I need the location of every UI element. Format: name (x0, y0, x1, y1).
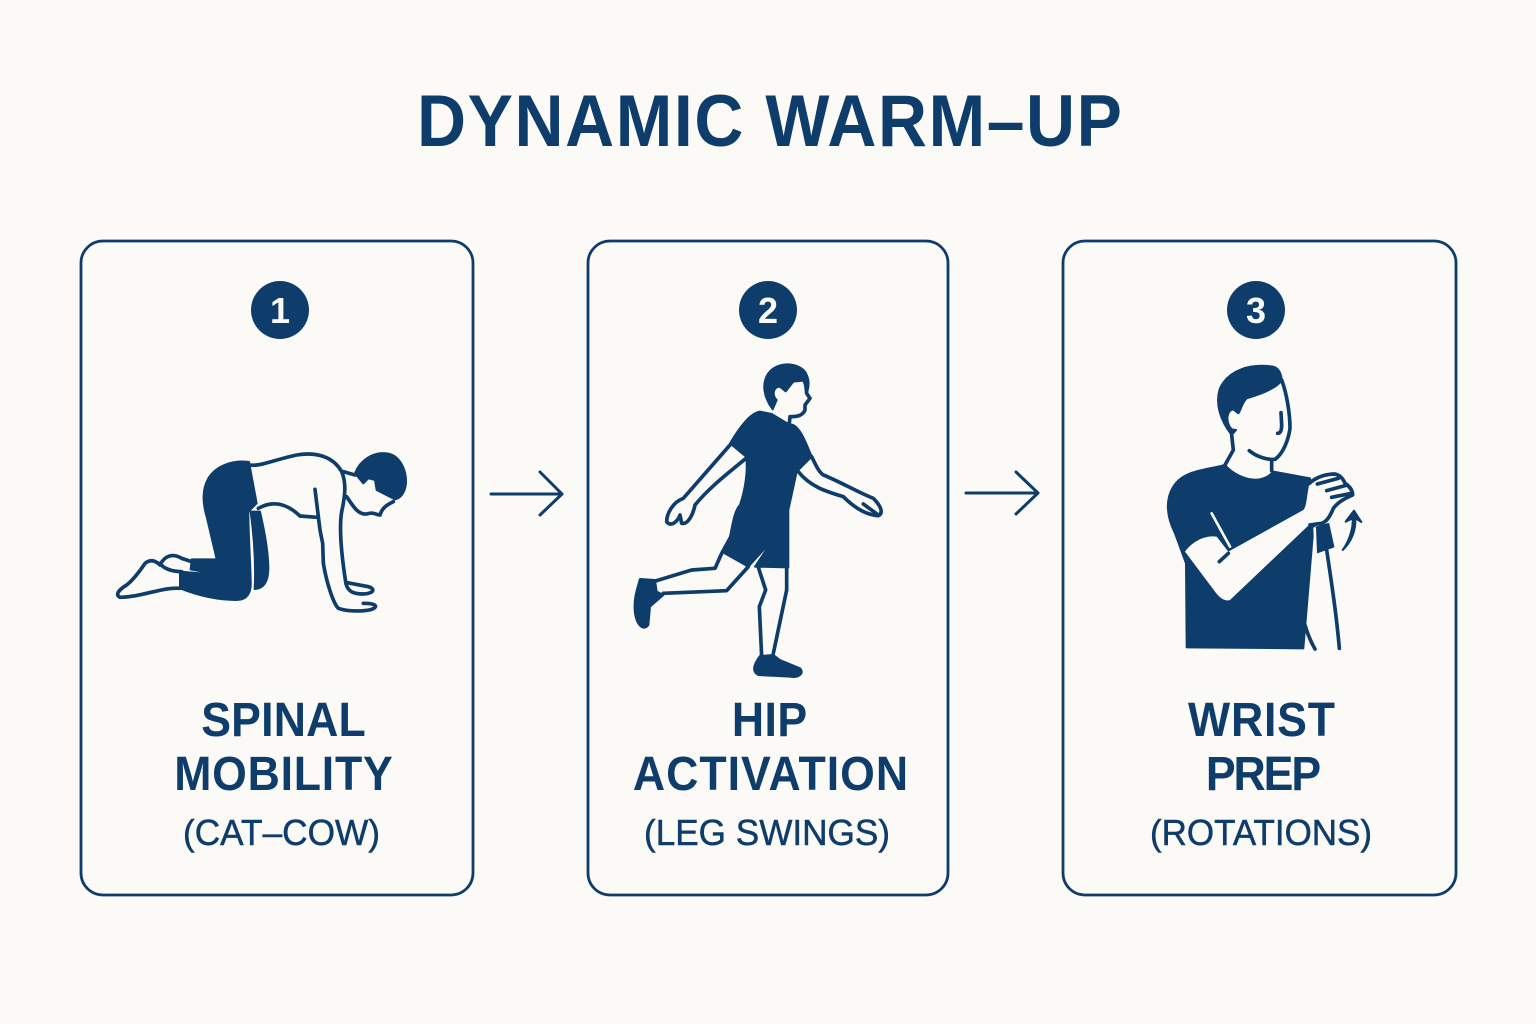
step number 3: 3 (1246, 290, 1266, 331)
step number 2: 2 (758, 290, 778, 331)
panel: wrist prep (1063, 241, 1456, 895)
arrow: step 1 to 2 (491, 472, 562, 515)
icon: cat-cow pose (118, 453, 406, 611)
panel: hip activation (588, 241, 948, 895)
label: hip activation: ACTIVATION (633, 747, 908, 800)
step number 1 (251, 281, 309, 339)
label: hip activation (633, 693, 908, 853)
step number 1: 1 (270, 290, 290, 331)
icon: wrist rotation figure (1168, 366, 1361, 649)
panel: spinal mobility (81, 241, 473, 895)
icon: leg swings figure (635, 364, 881, 677)
step number 2 (739, 281, 797, 339)
title: DYNAMIC WARM–UP (417, 80, 1122, 162)
label: spinal mobility (174, 693, 393, 853)
label: wrist prep: PREP (1206, 747, 1321, 800)
label: spinal mobility: MOBILITY (174, 747, 393, 800)
label: spinal mobility: SPINAL (201, 693, 366, 746)
label: hip activation: (LEG SWINGS) (644, 812, 890, 853)
label: wrist prep (1150, 693, 1372, 853)
label: spinal mobility: (CAT–COW) (183, 812, 380, 853)
label: wrist prep: WRIST (1188, 693, 1335, 746)
step number 3 (1227, 281, 1285, 339)
label: wrist prep: (ROTATIONS) (1150, 812, 1372, 853)
label: hip activation: HIP (732, 693, 807, 746)
arrow: step 2 to 3 (966, 472, 1038, 514)
